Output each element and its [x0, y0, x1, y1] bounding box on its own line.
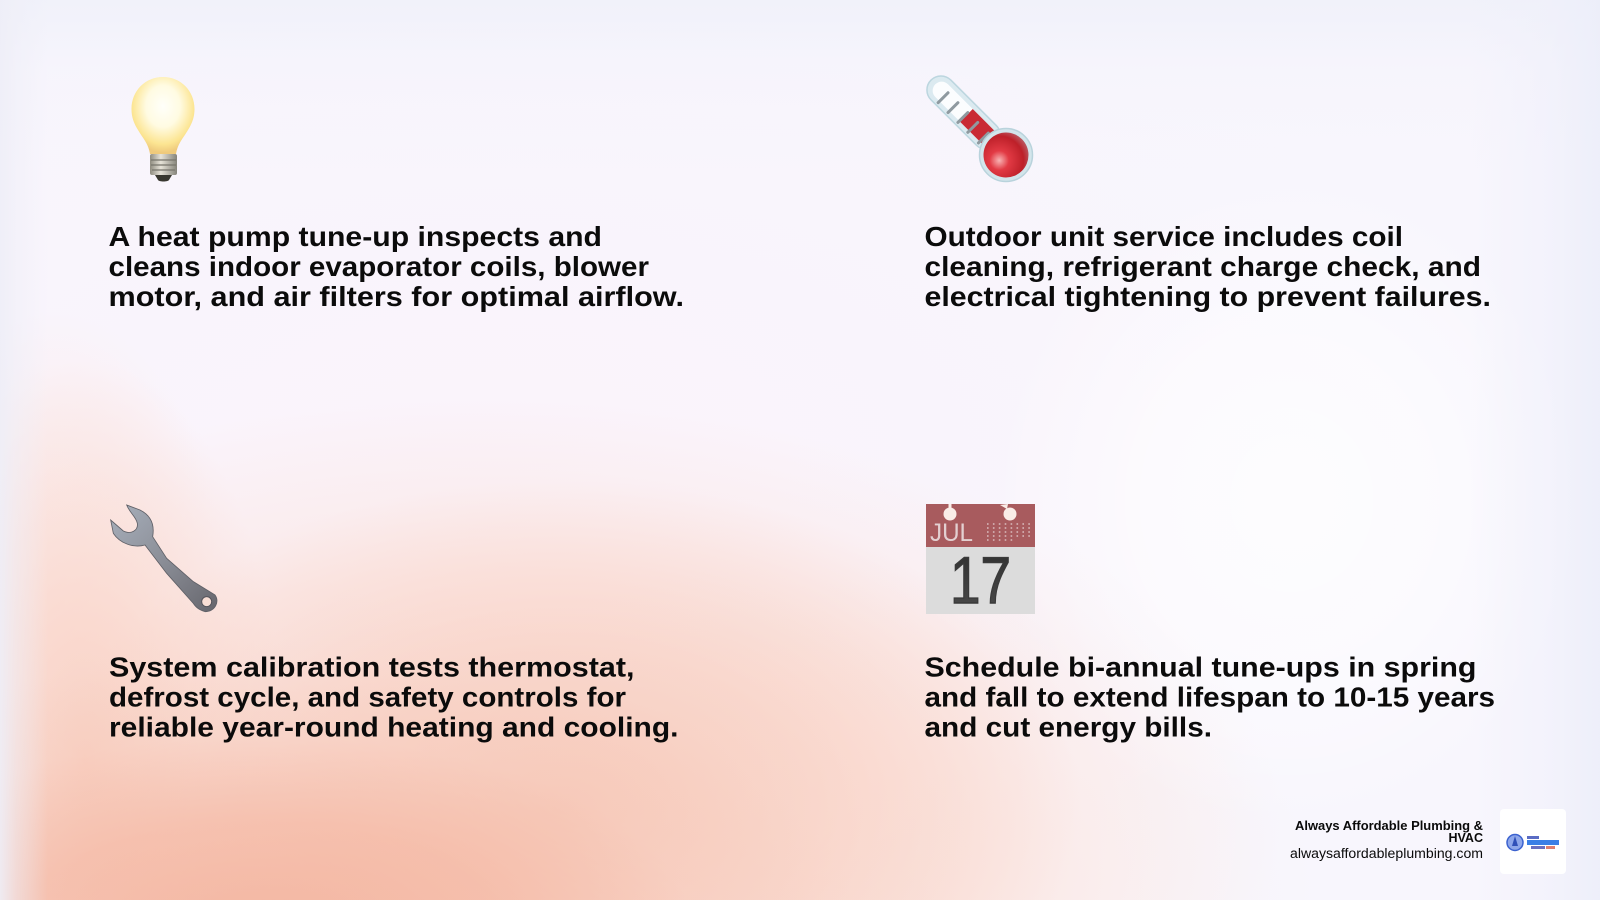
text: system calibration: defrost cycle, and safety controls for — [109, 682, 626, 712]
logo — [1500, 809, 1566, 874]
text: schedule: and cut energy bills. — [924, 712, 1212, 742]
icon: calendar: JUL — [930, 519, 973, 547]
text: indoor tune-up: motor, and air filters for optimal airflow. — [108, 281, 684, 312]
icon: light bulb — [132, 77, 194, 182]
icon: thermometer — [921, 70, 1032, 182]
icon: calendar: 17 — [950, 543, 1011, 617]
panel: outdoor unit service — [921, 70, 1491, 312]
text: system calibration: reliable year-round heating and cooling. — [109, 712, 678, 742]
brand text: HVAC — [1448, 831, 1483, 845]
text: outdoor unit service — [924, 221, 1491, 312]
text: system calibration — [109, 652, 678, 742]
panel: schedule — [924, 504, 1495, 742]
text: schedule: and fall to extend lifespan to 10-15 years — [924, 682, 1495, 712]
text: outdoor unit service: Outdoor unit service includes coil — [924, 221, 1403, 252]
brand text — [1290, 819, 1483, 861]
text: outdoor unit service: electrical tightening to prevent failures. — [924, 281, 1491, 312]
panel: indoor tune-up — [108, 77, 684, 312]
icon: wrench — [111, 505, 217, 612]
text: indoor tune-up — [108, 221, 684, 312]
icon: calendar — [926, 504, 1035, 617]
panel: system calibration — [109, 505, 678, 742]
text: schedule — [924, 652, 1495, 742]
text: schedule: Schedule bi-annual tune-ups in spring — [924, 652, 1476, 682]
text: indoor tune-up: A heat pump tune-up inspects and — [108, 221, 602, 252]
footer brand — [1290, 809, 1566, 874]
brand text: Always Affordable Plumbing & — [1295, 819, 1483, 833]
text: indoor tune-up: cleans indoor evaporator coils, blower — [108, 251, 649, 282]
text: outdoor unit service: cleaning, refrigerant charge check, and — [924, 251, 1481, 282]
text: system calibration: System calibration tests thermostat, — [109, 652, 634, 682]
brand text: alwaysaffordableplumbing.com — [1290, 846, 1483, 861]
